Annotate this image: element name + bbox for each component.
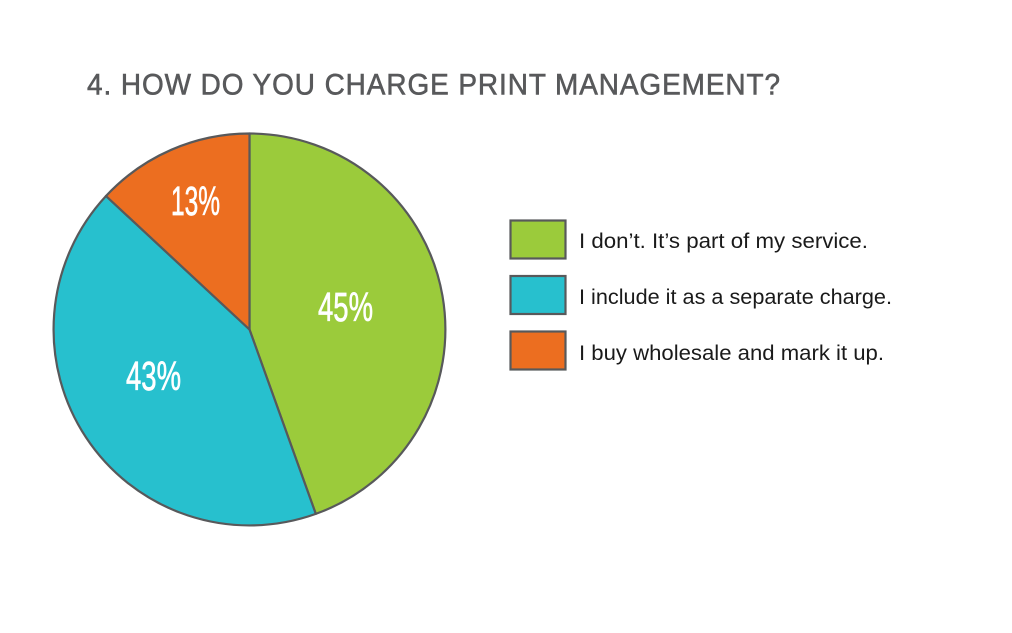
value: 43%: 43% xyxy=(126,353,181,399)
legend item: part of service xyxy=(510,220,868,258)
slice: 43% blue xyxy=(54,196,316,525)
value: 13%: 13% xyxy=(171,178,220,224)
legend xyxy=(510,220,892,370)
legend item: part of service: I don’t. It’s part of my service. xyxy=(579,229,868,253)
slice: 13% orange xyxy=(106,134,250,330)
value: 45%: 45% xyxy=(318,284,373,330)
legend item: wholesale: I buy wholesale and mark it up. xyxy=(579,341,884,365)
value labels xyxy=(126,178,373,399)
legend item: separate charge xyxy=(510,276,892,314)
slice: 45% green xyxy=(250,134,445,514)
title: 4. HOW DO YOU CHARGE PRINT MANAGEMENT? xyxy=(87,68,781,102)
pie chart xyxy=(54,134,445,525)
legend item: separate charge: I include it as a separate charge. xyxy=(579,285,892,309)
legend item: wholesale xyxy=(510,332,884,370)
